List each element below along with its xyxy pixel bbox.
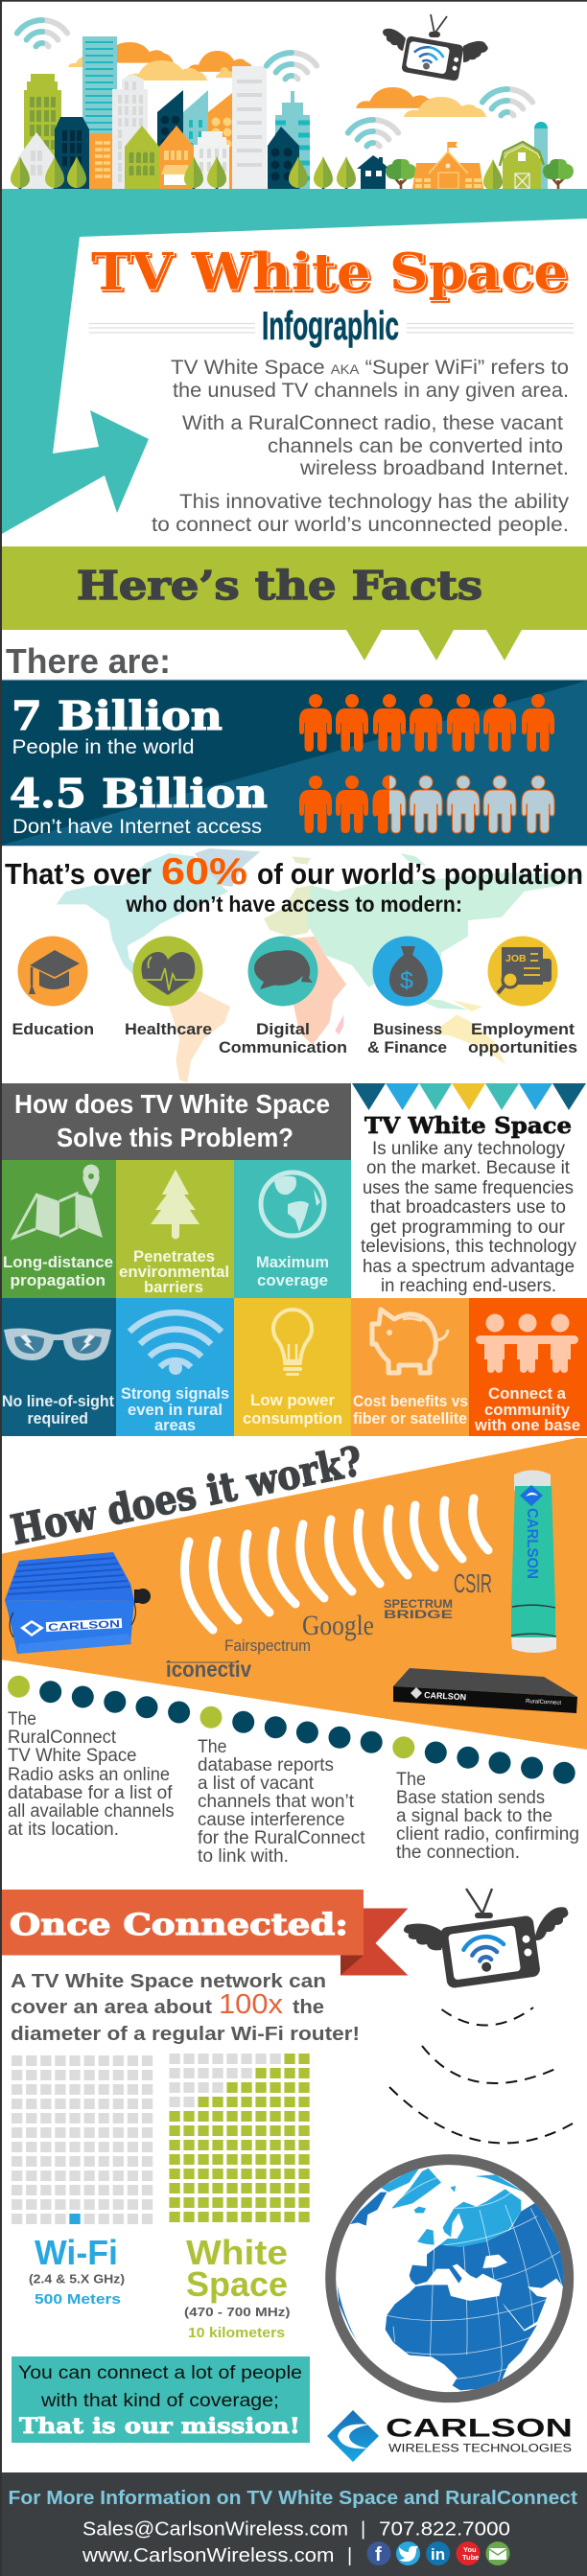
Scandinavia and northern Russia highlight (439, 2189, 521, 2247)
TV White Space explanation: on the market. Because it (366, 1158, 571, 1178)
base station antenna: CARLSON (524, 1508, 540, 1579)
trees (11, 156, 503, 199)
rack base station: RuralConnect (526, 1699, 561, 1706)
wi-fi coverage grid (12, 2055, 156, 2228)
slanted buildings (157, 90, 232, 189)
icon: healthcare (132, 936, 203, 1007)
dark house right (268, 127, 299, 189)
benefit: long-distance propagation (0, 1160, 116, 1298)
step three text: the connection. (396, 1843, 520, 1863)
facts banner (0, 546, 587, 661)
coverage text: the (293, 1997, 324, 2018)
wi-fi label: (2.4 & 5.X GHz) (29, 2272, 125, 2286)
database partner logos (166, 1568, 492, 1682)
world map background (57, 848, 584, 1082)
clouds right (356, 87, 486, 117)
dashed signal arcs (389, 2007, 573, 2143)
TV White Space explanation: TV White Space (364, 1113, 572, 1139)
icon: youtube (457, 2541, 480, 2565)
logo: Spectrum Bridge: SPECTRUM (384, 1597, 453, 1611)
once connected ribbon: Once Connected: (10, 1908, 348, 1942)
globe (331, 2160, 569, 2398)
icon: digital communication (247, 936, 318, 1007)
coverage text: 100x (219, 1989, 284, 2020)
white space coverage grid (169, 2054, 313, 2226)
Europe and Asia land (410, 2202, 564, 2330)
wifi icons (17, 20, 532, 146)
orange house (159, 126, 194, 189)
people row: seven billion (299, 694, 554, 752)
icon: facebook (366, 2541, 391, 2565)
graticule (386, 2176, 563, 2389)
label: business and finance: Business (373, 1020, 442, 1038)
barn (500, 142, 544, 189)
icon: linkedin (426, 2541, 450, 2565)
wi-fi label (29, 2233, 125, 2308)
icon: twitter (396, 2541, 420, 2565)
benefit: cost: Cost benefits vs (353, 1392, 468, 1410)
7 billion stat (12, 693, 223, 758)
benefit: penetrates environmental barriers (116, 1160, 234, 1298)
step one text: The (8, 1709, 36, 1729)
step three text (396, 1770, 579, 1863)
icon: youtube: Tube (462, 2553, 479, 2562)
TV White Space explanation: that broadcasters use to (370, 1197, 566, 1218)
7 billion stat: 7 Billion (12, 693, 223, 739)
label: healthcare: Healthcare (125, 1020, 212, 1038)
label: business and finance: & Finance (367, 1038, 447, 1056)
60 percent headline: 60% (161, 851, 247, 893)
light grey tower (112, 74, 148, 189)
client radio (5, 1552, 151, 1654)
mission callout (12, 2356, 310, 2443)
icon: employment opportunities: JOB (505, 953, 527, 964)
logo: Spectrum Bridge (384, 1597, 453, 1621)
Carlson logo: CARLSON (386, 2414, 573, 2443)
step one text: database for a list of (8, 1783, 173, 1803)
TV White Space explanation: uses the same frequencies (363, 1178, 574, 1198)
icon: employment opportunities (487, 936, 558, 1007)
icon: email (485, 2541, 510, 2565)
base station antenna (511, 1471, 556, 1653)
benefit: community: community (484, 1401, 571, 1419)
intro text: to connect our world’s unconnected people. (152, 514, 569, 536)
icon: facebook: f (375, 2544, 382, 2565)
white space label (184, 2233, 290, 2341)
mission callout: That is our mission! (19, 2414, 300, 2439)
teal building right (275, 91, 310, 189)
green house (125, 126, 159, 189)
step one text: Radio asks an online (8, 1765, 170, 1785)
how does it solve heading (0, 1083, 351, 1160)
intro text: This innovative technology has the ability (179, 491, 570, 513)
step three text: Base station sends (396, 1788, 545, 1808)
TV White Space explanation: in reaching end-users. (381, 1276, 556, 1296)
label: business and finance (367, 1020, 447, 1056)
how does it solve heading: Solve this Problem? (57, 1123, 294, 1152)
step dots (8, 1676, 575, 1784)
label: education: Education (12, 1020, 94, 1038)
facts banner: Here’s the Facts (77, 563, 482, 609)
white space label: (470 - 700 MHz) (184, 2305, 290, 2319)
step one text: all available channels (8, 1801, 175, 1822)
how does it work heading: How does it work? (7, 1437, 366, 1554)
benefit: long-distance propagation: propagation (10, 1271, 106, 1289)
arctic land: Greenland and Canada (350, 2167, 456, 2226)
green tower (24, 74, 61, 189)
coverage text: A TV White Space network can (11, 1971, 326, 1992)
step one text: RuralConnect (8, 1728, 117, 1748)
rack base station: CARLSON (424, 1690, 466, 1702)
clouds behind city (68, 42, 254, 81)
small white building (194, 131, 229, 189)
benefit: no line of sight: No line-of-sight (2, 1392, 114, 1410)
4.5 billion stat: Don’t have Internet access (12, 816, 262, 838)
TV White Space explanation: has a spectrum advantage (363, 1257, 575, 1277)
step two text: database reports (198, 1755, 334, 1775)
white house (17, 132, 56, 189)
label: digital communication: Communication (219, 1038, 347, 1056)
icon: youtube: You (463, 2545, 477, 2554)
intro text: TV White Space AKA “Super WiFi” refers to (171, 357, 569, 379)
step two text: for the RuralConnect (198, 1828, 365, 1848)
step three text: a signal back to the (396, 1806, 552, 1826)
4.5 billion stat (10, 771, 268, 838)
mission callout: You can connect a lot of people (18, 2363, 302, 2383)
benefit: no line of sight (0, 1298, 116, 1436)
step two text: The (198, 1737, 226, 1757)
benefit: community: Connect a (488, 1384, 567, 1403)
footer heading: For More Information on TV White Space and RuralConnect (8, 2488, 577, 2509)
Carlson logo (327, 2410, 573, 2462)
flying TV icon (383, 14, 488, 81)
coverage text: cover an area about (11, 1997, 212, 2018)
Africa land (386, 2285, 537, 2390)
subtitle with rules (88, 303, 574, 348)
label: employment opportunities: Employment (471, 1020, 575, 1038)
benefit: no line of sight: required (27, 1409, 88, 1427)
subtitle with rules: Infographic (262, 303, 399, 348)
logo: Spectrum Bridge: BRIDGE (384, 1608, 453, 1621)
round tree left (386, 159, 416, 190)
Left-edge coast sliver (338, 2285, 362, 2349)
step one text: TV White Space (8, 1746, 136, 1766)
bunting (352, 1083, 586, 1110)
benefit: strong signals: Strong signals (121, 1384, 229, 1403)
dark blue building (55, 117, 89, 189)
benefit: cost (351, 1298, 469, 1436)
intro text: With a RuralConnect radio, these vacant (182, 412, 563, 434)
there are heading: There are: (6, 641, 171, 681)
label: employment opportunities (468, 1020, 577, 1056)
Black Sea (482, 2255, 507, 2268)
step two text: a list of vacant (198, 1774, 315, 1794)
wi-fi label: Wi-Fi (35, 2233, 118, 2272)
logo: Google: Google (302, 1610, 374, 1641)
60 percent headline (5, 851, 583, 917)
step two text: cause interference (198, 1810, 345, 1830)
icon: linkedin: in (431, 2545, 445, 2564)
icon: education (17, 936, 88, 1007)
white space label: Space (186, 2264, 288, 2304)
step two text: channels that won’t (198, 1792, 355, 1812)
TV White Space explanation (361, 1113, 576, 1296)
teal tower (82, 36, 117, 189)
step two text (198, 1737, 365, 1867)
rack base station (393, 1668, 577, 1713)
benefit: maximum coverage: Maximum (256, 1253, 329, 1271)
60 percent headline: who don’t have access to modern: (126, 892, 462, 917)
mission callout: with that kind of coverage; (40, 2391, 279, 2411)
benefit: low power (234, 1298, 351, 1436)
flying TV icon (404, 1889, 568, 1989)
benefit: maximum coverage (234, 1160, 351, 1298)
wi-fi label: 500 Meters (35, 2291, 121, 2308)
7 billion stat: People in the world (12, 736, 194, 758)
white space label: White (186, 2233, 288, 2272)
how it works orange band (0, 1438, 587, 1750)
footer (0, 2472, 587, 2576)
signal arcs (185, 1498, 488, 1630)
white intro panel with arrow cut-out (0, 219, 587, 546)
footer contact (82, 2519, 510, 2566)
4.5 billion stat: 4.5 Billion (10, 771, 268, 817)
TV White Space explanation: televisions, this technology (361, 1237, 576, 1257)
TV White Space explanation: Is unlike any technology (372, 1139, 565, 1159)
British Isles (417, 2229, 434, 2245)
step three text: client radio, confirming (396, 1824, 579, 1845)
round tree right (543, 159, 574, 190)
how does it solve heading: How does TV White Space (14, 1089, 330, 1119)
school (412, 142, 483, 189)
label: digital communication (219, 1020, 347, 1056)
stats panel (0, 680, 587, 847)
benefit: penetrates environmental barriers: barriers (144, 1278, 203, 1296)
footer contact: | (347, 2545, 352, 2566)
label: digital communication: Digital (256, 1020, 310, 1038)
logo: Fairspectrum: Fairspectrum (224, 1636, 311, 1655)
silo (534, 122, 548, 189)
footer contact: Sales@CarlsonWireless.com (82, 2519, 348, 2541)
icon: business and finance: $ (400, 967, 413, 994)
footer contact: www.CarlsonWireless.com (82, 2545, 335, 2566)
teal ground and arrow band (0, 189, 587, 546)
benefit: low power: Low power (250, 1391, 335, 1409)
benefit: low power: consumption (243, 1409, 342, 1427)
step two text: to link with. (198, 1846, 289, 1867)
logo: iconectiv: iconectiv (166, 1657, 251, 1682)
white space label: 10 kilometers (188, 2325, 285, 2341)
coverage text (11, 1971, 360, 2045)
once connected ribbon (0, 1890, 409, 1975)
orange building (89, 133, 112, 189)
intro text: wireless broadband Internet. (299, 457, 569, 479)
benefit: penetrates environmental barriers: Penetrates (133, 1247, 215, 1265)
benefit: long-distance propagation: Long-distance (3, 1253, 113, 1271)
benefit: penetrates environmental barriers: environmental (119, 1263, 229, 1281)
benefit: community (469, 1298, 587, 1436)
step one text: at its location. (8, 1820, 119, 1840)
Arctic coast sliver (475, 2174, 525, 2193)
step one text (8, 1709, 175, 1840)
label: employment opportunities: opportunities (468, 1038, 577, 1056)
white tall building (232, 66, 267, 189)
benefit: cost: fiber or satellite (353, 1409, 467, 1427)
benefit: strong signals: even in rural (128, 1401, 223, 1419)
benefit: community: with one base (474, 1416, 580, 1434)
60 percent headline: That’s over (5, 857, 152, 891)
Carlson logo: WIRELESS TECHNOLOGIES (388, 2441, 572, 2454)
footer contact: | (361, 2519, 365, 2541)
client radio: CARLSON (48, 1618, 120, 1634)
icon: business and finance (372, 936, 443, 1007)
intro text: the unused TV channels in any given area. (173, 380, 569, 402)
intro text: channels can be converted into (268, 435, 563, 457)
TV White Space explanation: get programming to our (370, 1218, 566, 1238)
header city illustration (11, 14, 574, 199)
benefit: strong signals (116, 1298, 234, 1436)
benefit: maximum coverage: coverage (257, 1271, 328, 1289)
step three text: The (396, 1770, 426, 1790)
small blue house (357, 155, 389, 189)
coverage text: diameter of a regular Wi-Fi router! (11, 2024, 360, 2045)
footer contact: 707.822.7000 (379, 2519, 510, 2541)
benefit: strong signals: areas (154, 1416, 196, 1434)
title: TV White Space (91, 243, 568, 302)
people row: 4.5 billion unconnected (299, 776, 554, 833)
logo: CSIR: CSIR (454, 1568, 492, 1598)
intro text (152, 357, 570, 536)
